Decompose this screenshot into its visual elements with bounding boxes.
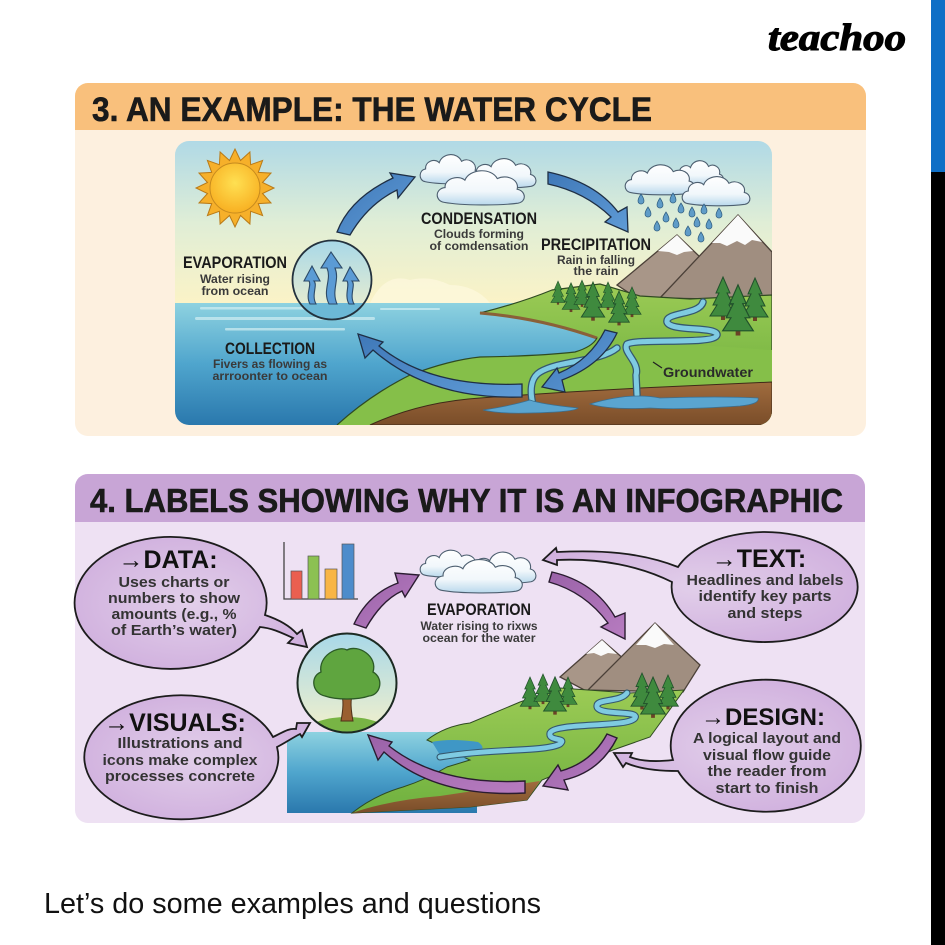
callout: design: →DESIGN:	[701, 704, 825, 731]
ocean	[175, 303, 772, 425]
callout: visuals: icons make complex	[102, 753, 258, 769]
groundwater pools	[483, 396, 758, 413]
trees: right cluster	[710, 277, 768, 336]
panel header band	[75, 83, 866, 130]
callout: visuals: Illustrations and	[118, 736, 242, 752]
right mountain	[660, 215, 772, 300]
arrow: up to cloud	[354, 573, 419, 628]
soil layer	[370, 382, 772, 425]
callout: visuals	[84, 695, 310, 819]
illustration: simplified cycle	[284, 542, 700, 813]
evaporation circle icon	[290, 240, 374, 323]
label: condensation	[421, 209, 537, 253]
label: condensation: of comdensation	[430, 241, 528, 253]
trees	[520, 673, 678, 718]
right mountain	[588, 623, 700, 692]
heading: labels: 4. LABELS SHOWING WHY IT IS AN INFOGRAPHIC	[90, 482, 843, 519]
clouds: condensation	[420, 155, 536, 205]
panel header band	[75, 474, 865, 522]
left mountain	[617, 235, 700, 300]
panel: labels showing why it is an infographic	[75, 474, 865, 823]
label: evaporation: EVAPORATION	[427, 600, 531, 619]
left mountain	[560, 640, 625, 692]
arrow: collection to ocean	[358, 334, 522, 397]
sky	[175, 141, 772, 306]
label: evaporation	[183, 253, 287, 298]
lower land	[337, 338, 772, 425]
label: precipitation: Rain in falling	[557, 255, 635, 267]
label: evaporation: from ocean	[202, 286, 268, 298]
arrow: precipitation to collection	[542, 330, 617, 392]
bar chart	[284, 542, 358, 599]
river	[440, 693, 635, 757]
ocean	[287, 732, 477, 813]
arrow: land down	[543, 734, 617, 790]
label: condensation: Clouds forming	[434, 229, 524, 241]
soil	[352, 781, 540, 813]
label: collection: arrroonter to ocean	[212, 371, 328, 383]
callout: data: Uses charts or	[118, 575, 230, 591]
sun	[196, 149, 274, 227]
callout: design	[614, 680, 861, 812]
callout: data: numbers to show	[108, 591, 241, 607]
panel: water cycle example	[75, 83, 866, 436]
callout: data: →DATA:	[118, 546, 218, 574]
ocean highlights	[195, 307, 440, 330]
arrow: back to ocean	[368, 735, 525, 793]
label: evaporation: Water rising to rixws	[420, 621, 538, 633]
label: evaporation: ocean for the water	[422, 633, 536, 645]
label: groundwater: Groundwater	[663, 364, 754, 380]
callout: design: A logical layout and	[693, 731, 841, 747]
callout: text: Headlines and labels	[686, 573, 844, 589]
lake bank	[480, 313, 597, 338]
arrow: evaporation to condensation	[337, 173, 415, 235]
callout: text	[543, 532, 858, 642]
label: evaporation: Water rising	[200, 274, 270, 286]
panel background	[75, 83, 866, 436]
rain drops	[638, 193, 722, 242]
lake	[432, 740, 482, 758]
distant haze hills	[370, 278, 490, 303]
lower land outline	[337, 338, 597, 425]
heading: an example: 3. AN EXAMPLE: THE WATER CYCLE	[92, 91, 652, 129]
cloud	[420, 550, 536, 593]
label: precipitation	[541, 235, 651, 278]
land	[352, 688, 684, 813]
label: collection	[212, 339, 328, 383]
callout: text: and steps	[728, 606, 802, 622]
label: precipitation: the rain	[574, 266, 618, 278]
panel background	[75, 474, 865, 823]
logo: teachoo: teachoo	[768, 17, 906, 59]
label: collection: Fivers as flowing as	[213, 359, 327, 371]
callout: data	[75, 537, 307, 669]
callout: design: start to finish	[716, 781, 818, 797]
label: condensation: CONDENSATION	[421, 209, 537, 228]
arrow: cloud to mountains	[549, 572, 625, 639]
label: precipitation: PRECIPITATION	[541, 235, 651, 254]
slide accent bar	[931, 0, 945, 945]
caption: Let’s do some examples and questions	[44, 888, 541, 920]
river	[531, 302, 717, 405]
callout: visuals: →VISUALS:	[104, 709, 246, 737]
trees: left cluster	[551, 280, 641, 325]
clouds: precipitation	[625, 161, 750, 206]
tree circle icon	[298, 634, 396, 743]
label: evaporation	[420, 600, 538, 645]
callout: design: the reader from	[708, 764, 826, 780]
callout: data: of Earth’s water)	[111, 623, 237, 639]
upper land	[480, 283, 772, 350]
callout: visuals: processes concrete	[105, 769, 255, 785]
label: evaporation: EVAPORATION	[183, 253, 287, 272]
callout: text: identify key parts	[698, 589, 832, 605]
callout: data: amounts (e.g., %	[112, 607, 237, 623]
illustration: water cycle scene	[175, 141, 772, 425]
label: collection: COLLECTION	[225, 339, 315, 358]
callout: text: →TEXT:	[712, 545, 806, 573]
callout: design: visual flow guide	[703, 748, 831, 764]
arrow: condensation to precipitation	[548, 172, 628, 232]
